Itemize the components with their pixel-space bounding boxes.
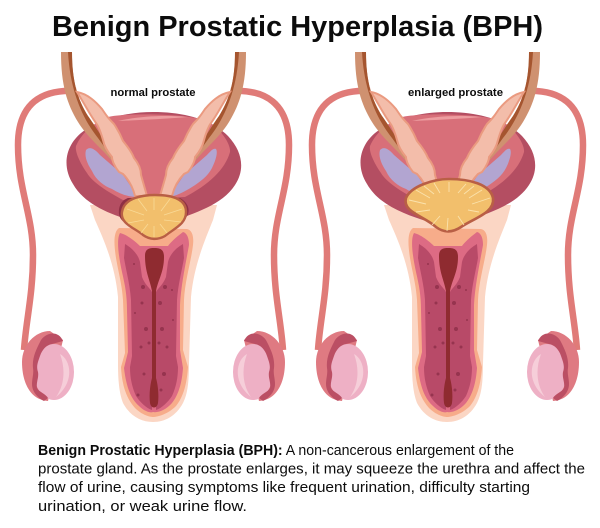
left vas deferens [355, 52, 418, 174]
right vas deferens [477, 52, 540, 174]
shaft [384, 205, 511, 422]
seminal vesicles [85, 148, 217, 197]
description text: flow of urine, causing symptoms like frequent urination, difficulty starting [38, 480, 530, 496]
left spermatic tube [18, 91, 76, 350]
label: enlarged prostate: enlarged prostate [408, 87, 503, 99]
right ejaculatory duct [160, 92, 230, 196]
seminal vesicles [379, 148, 511, 197]
shaft [90, 205, 217, 422]
panel: enlarged prostate [312, 52, 583, 422]
panel: normal prostate [18, 52, 289, 422]
description text: Benign Prostatic Hyperplasia (BPH): A non-cancerous enlargement of the [38, 443, 514, 459]
right testicle [527, 331, 579, 401]
left spermatic tube [312, 91, 370, 350]
left ejaculatory duct [77, 92, 147, 196]
left testicle [316, 331, 368, 401]
bladder [67, 112, 241, 222]
left ejaculatory duct [371, 92, 441, 196]
urethra [439, 248, 458, 408]
label: normal prostate: normal prostate [110, 87, 196, 99]
left vas deferens [61, 52, 124, 174]
urethra [145, 248, 164, 408]
title: Benign Prostatic Hyperplasia (BPH) [52, 11, 543, 43]
right spermatic tube [231, 91, 289, 350]
right testicle [233, 331, 285, 401]
right spermatic tube [525, 91, 583, 350]
right vas deferens [183, 52, 246, 174]
description text [38, 443, 585, 515]
description text: urination, or weak urine flow. [38, 499, 247, 515]
left testicle [22, 331, 74, 401]
prostate: enlarged [406, 179, 493, 232]
prostate: normal [119, 195, 189, 239]
bladder [361, 112, 535, 222]
right ejaculatory duct [454, 92, 524, 196]
description text: prostate gland. As the prostate enlarges, it may squeeze the urethra and affect the [38, 462, 585, 478]
